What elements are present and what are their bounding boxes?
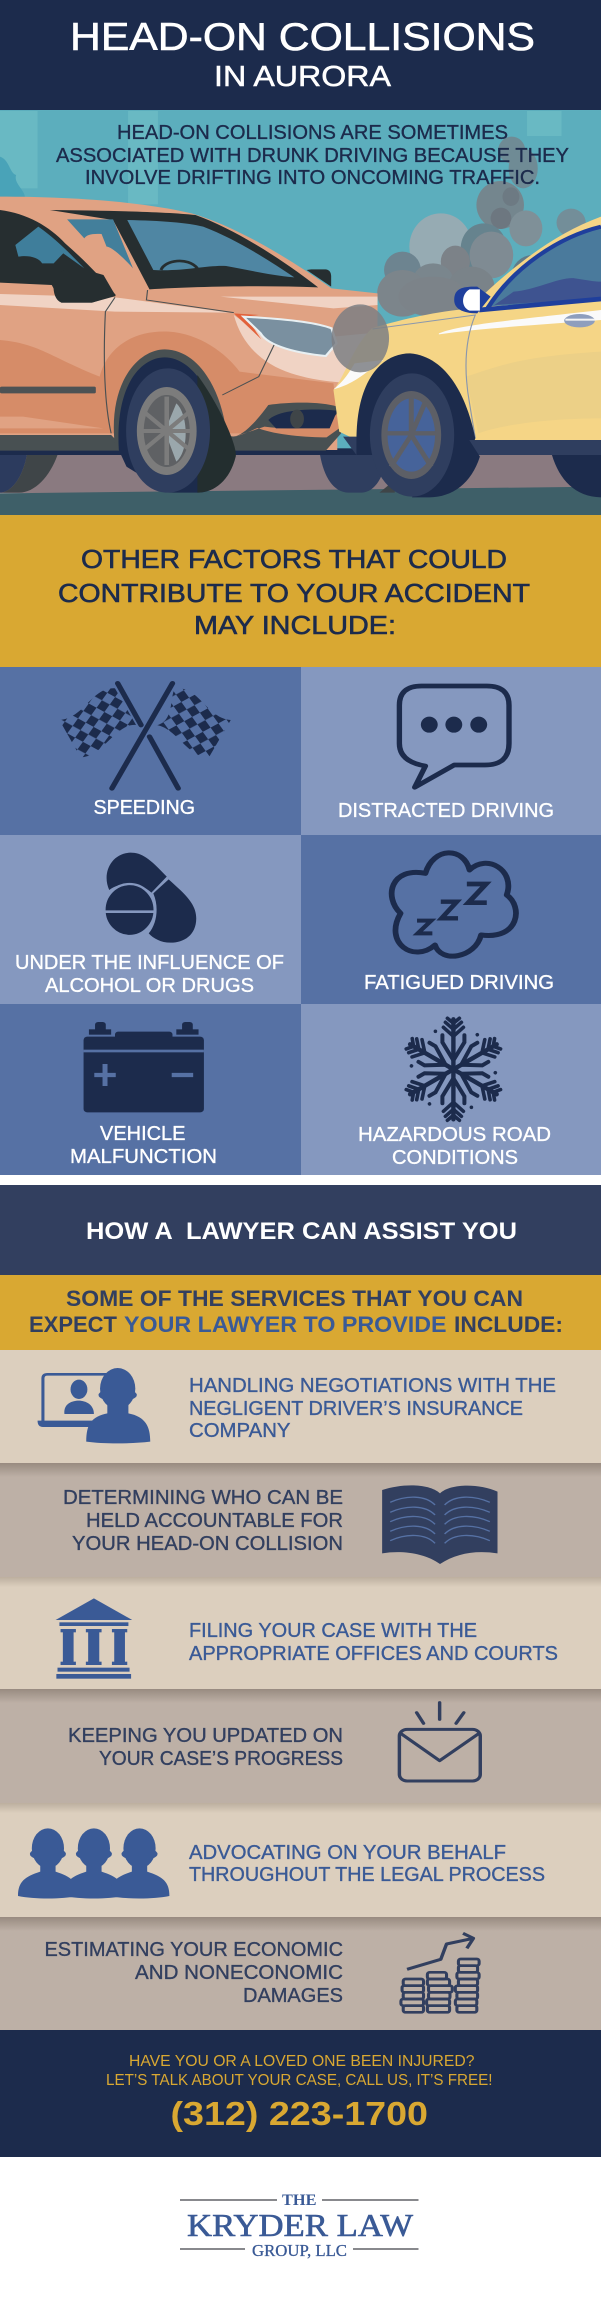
text: AND NONECONOMIC — [135, 1962, 343, 1984]
text: FILING YOUR CASE WITH THE — [189, 1620, 477, 1642]
text: NEGLIGENT DRIVER’S INSURANCE — [189, 1398, 523, 1420]
panel: under the influence — [0, 835, 301, 1004]
text: COMPANY — [189, 1420, 290, 1442]
panel: distracted driving — [301, 667, 601, 835]
panel: services intro: SOME OF THE SERVICES THAT YOU CAN — [66, 1286, 523, 1311]
panel: speeding — [0, 667, 301, 835]
text: ESTIMATING YOUR ECONOMIC — [44, 1939, 343, 1961]
icon: envelope — [399, 1703, 480, 1781]
smoke over vehicles — [332, 304, 389, 372]
panel: other factors heading: MAY INCLUDE: — [194, 612, 396, 640]
title: HEAD-ON COLLISIONS — [70, 16, 535, 59]
text: YOUR HEAD-ON COLLISION — [72, 1533, 343, 1555]
call prompt: HAVE YOU OR A LOVED ONE BEEN INJURED? — [129, 2053, 475, 2070]
label — [70, 1123, 217, 1168]
yellow car — [333, 217, 601, 497]
icon: battery — [84, 1022, 204, 1112]
panel: call to action footer — [0, 2030, 601, 2157]
text: APPROPRIATE OFFICES AND COURTS — [189, 1643, 558, 1665]
label: ALCOHOL OR DRUGS — [45, 975, 254, 997]
text: DAMAGES — [243, 1985, 343, 2007]
panel: services intro: EXPECT — [29, 1312, 117, 1337]
logo: KRYDER LAW — [187, 2207, 414, 2243]
text: HANDLING NEGOTIATIONS WITH THE — [189, 1375, 556, 1397]
panel: estimating damages — [0, 1917, 601, 2030]
text — [189, 1842, 545, 1886]
label: UNDER THE INFLUENCE OF — [15, 952, 284, 974]
panel: how a lawyer can assist you: HOW A LAWYER CAN ASSIST YOU — [86, 1218, 517, 1245]
hero illustration: collision — [0, 110, 601, 515]
phone number: (312) 223-1700 — [170, 2095, 428, 2132]
text — [68, 1725, 343, 1770]
subtitle: IN AURORA — [214, 61, 392, 93]
text — [189, 1620, 558, 1665]
panel: keeping you updated — [0, 1689, 601, 1803]
label: MALFUNCTION — [70, 1146, 217, 1168]
panel: other factors heading: CONTRIBUTE TO YOUR ACCIDENT — [58, 580, 530, 608]
panel: other factors heading: OTHER FACTORS THAT COULD — [81, 546, 507, 574]
panel: other factors heading — [0, 515, 601, 667]
panel: handling negotiations — [0, 1350, 601, 1463]
panel: fatigued driving — [301, 835, 601, 1004]
hero text: ASSOCIATED WITH DRUNK DRIVING BECAUSE THEY — [56, 145, 569, 167]
text: THROUGHOUT THE LEGAL PROCESS — [189, 1864, 545, 1886]
text — [63, 1487, 343, 1555]
panel: hazardous road conditions — [301, 1004, 601, 1175]
label: CONDITIONS — [392, 1147, 518, 1169]
header panel — [0, 0, 601, 110]
text: HELD ACCOUNTABLE FOR — [86, 1510, 343, 1532]
label: FATIGUED DRIVING — [364, 972, 554, 994]
panel: services intro — [0, 1275, 601, 1350]
label: HAZARDOUS ROAD — [358, 1124, 551, 1146]
panel: vehicle malfunction — [0, 1004, 301, 1175]
call prompt — [106, 2053, 492, 2089]
icon: snowflake — [399, 1018, 507, 1120]
text: ADVOCATING ON YOUR BEHALF — [189, 1842, 506, 1864]
text: KEEPING YOU UPDATED ON — [68, 1725, 343, 1747]
logo: GROUP, LLC — [252, 2241, 347, 2260]
icon: pills — [104, 853, 196, 943]
icon: three people — [18, 1828, 169, 1898]
panel: filing your case — [0, 1577, 601, 1689]
panel: services intro: INCLUDE: — [454, 1312, 563, 1337]
label — [358, 1124, 551, 1169]
icon: sleep cloud — [392, 853, 516, 956]
label — [15, 952, 284, 997]
panel: advocating on your behalf — [0, 1803, 601, 1917]
orange car — [0, 197, 395, 493]
panel: determining accountability — [0, 1463, 601, 1577]
smoke — [377, 137, 586, 317]
hero text: INVOLVE DRIFTING INTO ONCOMING TRAFFIC. — [85, 167, 540, 189]
logo — [180, 2192, 418, 2260]
icon: speech bubble — [399, 686, 509, 787]
text — [189, 1375, 556, 1442]
icon: open book — [382, 1485, 498, 1564]
icon: courthouse — [56, 1598, 132, 1679]
label: DISTRACTED DRIVING — [338, 800, 554, 822]
icon: coin stacks with arrow — [401, 1933, 479, 2012]
panel: how a lawyer can assist you — [0, 1185, 601, 1275]
label: SPEEDING — [94, 797, 195, 819]
text: YOUR CASE’S PROGRESS — [99, 1748, 343, 1770]
text: DETERMINING WHO CAN BE — [63, 1487, 343, 1509]
hero text — [56, 122, 569, 189]
label: VEHICLE — [100, 1123, 186, 1145]
icon: checkered flags — [59, 683, 231, 788]
icon: video call — [38, 1368, 150, 1443]
logo: THE — [282, 2192, 316, 2209]
call prompt: LET’S TALK ABOUT YOUR CASE, CALL US, IT’S FREE! — [106, 2072, 492, 2089]
hero text: HEAD-ON COLLISIONS ARE SOMETIMES — [117, 122, 508, 144]
text — [44, 1939, 343, 2007]
panel: services intro: YOUR LAWYER TO PROVIDE — [124, 1312, 446, 1337]
